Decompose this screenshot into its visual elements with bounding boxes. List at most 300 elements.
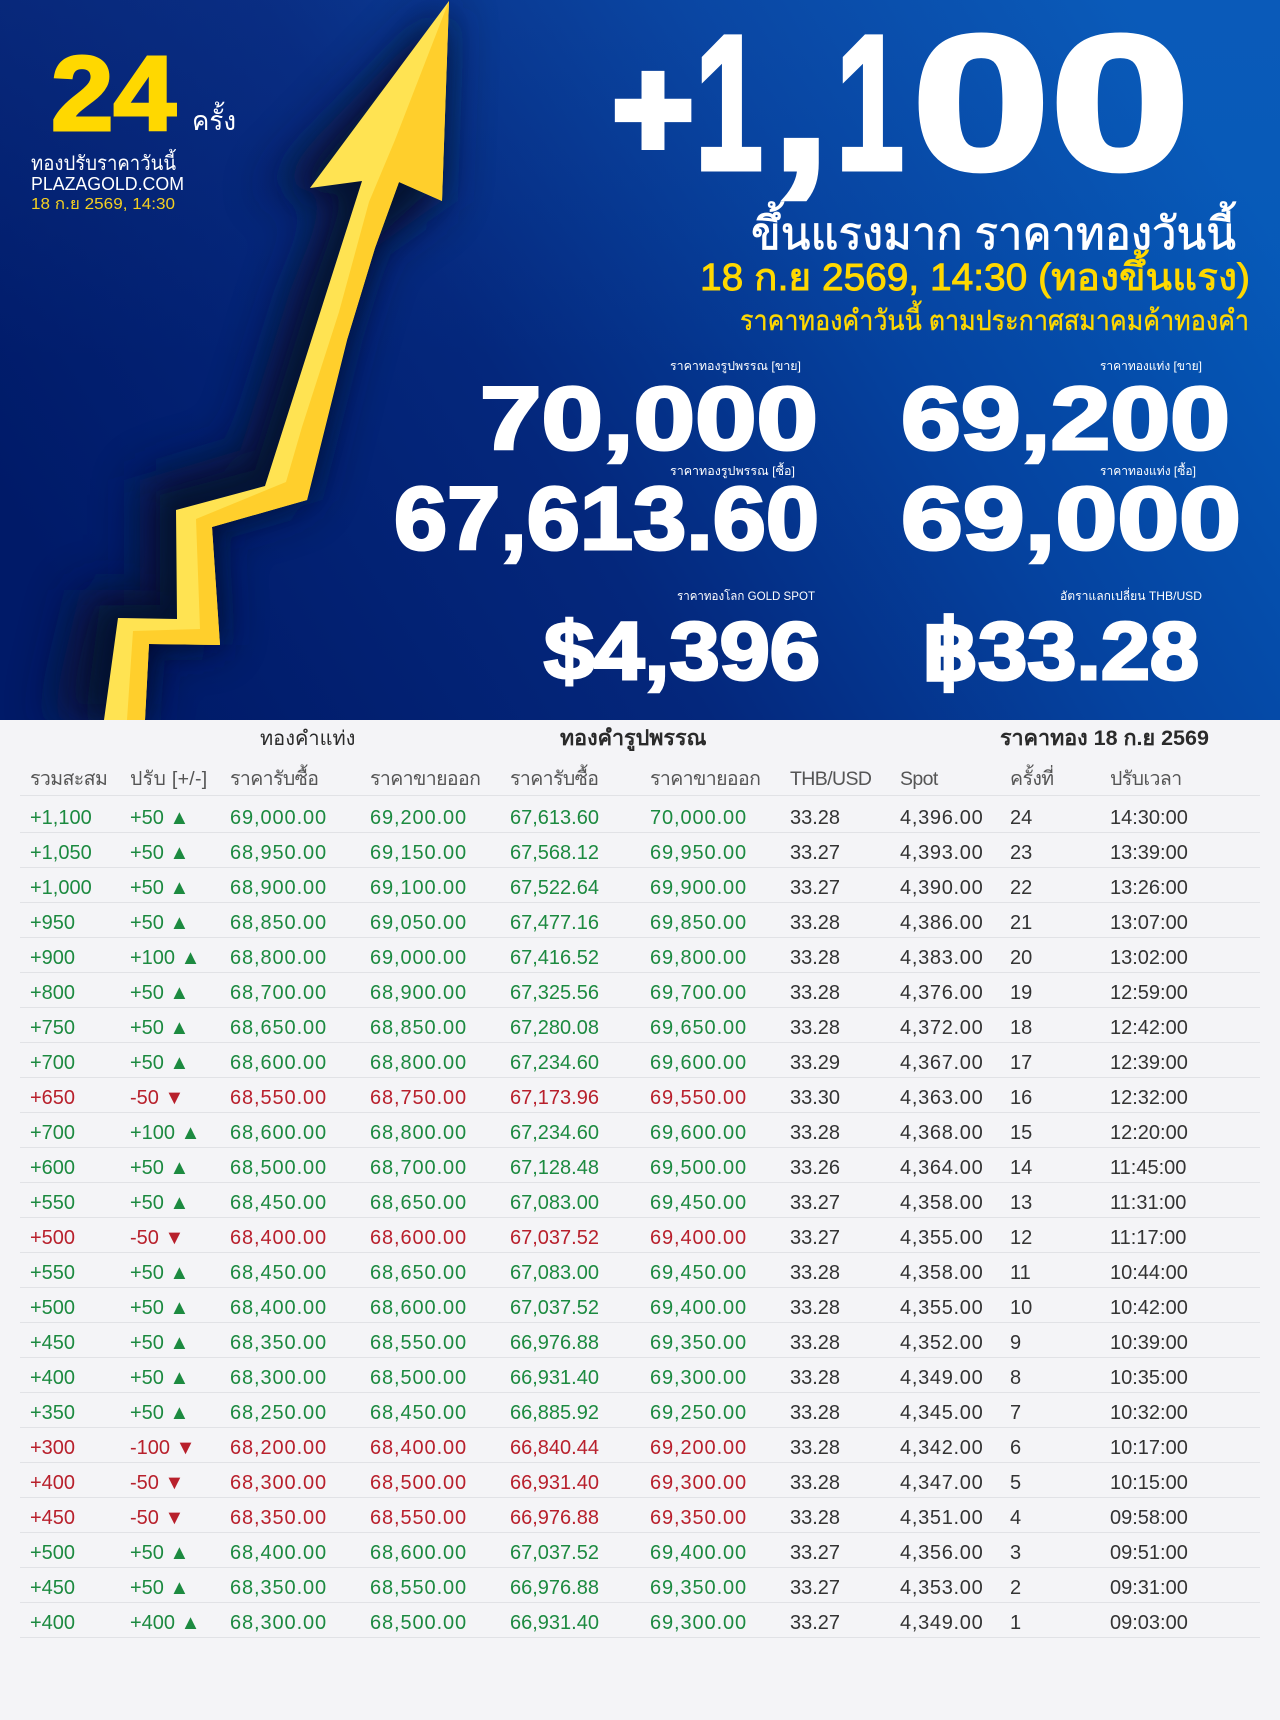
row 13: 33.27 — [790, 1192, 840, 1214]
row 15: 69,600.00 — [650, 1122, 747, 1144]
row 10: 67,037.52 — [510, 1297, 599, 1319]
row 8: 68,300.00 — [230, 1367, 327, 1389]
row 15: 12:20:00 — [1110, 1122, 1188, 1144]
row 22: 33.27 — [790, 877, 840, 899]
row 1: 68,500.00 — [370, 1612, 467, 1634]
row 16: -50 ▼ — [130, 1087, 184, 1109]
row 12: +500 — [30, 1227, 75, 1249]
row 4: 4,351.00 — [900, 1507, 983, 1529]
row 24: +50 ▲ — [130, 807, 189, 829]
row 7: 7 — [1010, 1402, 1021, 1424]
row 19: +800 — [30, 982, 75, 1004]
row 9: 69,350.00 — [650, 1332, 747, 1354]
row 21: 69,050.00 — [370, 912, 467, 934]
row 4: 66,976.88 — [510, 1507, 599, 1529]
headline change +1,100: , — [772, 0, 830, 210]
price: bar buy: 69,000 — [901, 468, 1241, 568]
row 1: 69,300.00 — [650, 1612, 747, 1634]
row 4: 69,350.00 — [650, 1507, 747, 1529]
row 6: 68,200.00 — [230, 1437, 327, 1459]
row 19: 68,700.00 — [230, 982, 327, 1004]
row 19: 67,325.56 — [510, 982, 599, 1004]
row 20: 68,800.00 — [230, 947, 327, 969]
row 3: 33.27 — [790, 1542, 840, 1564]
headline change +1,100: 1 — [836, 0, 904, 210]
row 7: 4,345.00 — [900, 1402, 983, 1424]
row 15: 68,600.00 — [230, 1122, 327, 1144]
row 17: +700 — [30, 1052, 75, 1074]
row 21: 68,850.00 — [230, 912, 327, 934]
hero banner — [0, 0, 1280, 720]
row 22: 13:26:00 — [1110, 877, 1188, 899]
row 19: +50 ▲ — [130, 982, 189, 1004]
row 5: 5 — [1010, 1472, 1021, 1494]
column headers: ราคาขายออก — [650, 768, 760, 790]
row 16: 16 — [1010, 1087, 1032, 1109]
row 14: 11:45:00 — [1110, 1157, 1186, 1179]
row 1: 66,931.40 — [510, 1612, 599, 1634]
row 13: 67,083.00 — [510, 1192, 599, 1214]
row 3: 09:51:00 — [1110, 1542, 1188, 1564]
price: ornament buy: 67,613.60 — [394, 468, 819, 568]
row 15: 67,234.60 — [510, 1122, 599, 1144]
row 10: 4,355.00 — [900, 1297, 983, 1319]
row 4: 09:58:00 — [1110, 1507, 1188, 1529]
row 1: +400 — [30, 1612, 75, 1634]
row 10: 10 — [1010, 1297, 1032, 1319]
row 1: 68,300.00 — [230, 1612, 327, 1634]
row 17: 12:39:00 — [1110, 1052, 1188, 1074]
row 5: 69,300.00 — [650, 1472, 747, 1494]
headline change +1,100: 0 — [912, 0, 1050, 210]
row 1: 4,349.00 — [900, 1612, 983, 1634]
row 3: 69,400.00 — [650, 1542, 747, 1564]
row 1: +400 ▲ — [130, 1612, 200, 1634]
column headers — [20, 760, 1260, 796]
row 24: 24 — [1010, 807, 1032, 829]
row 17: 67,234.60 — [510, 1052, 599, 1074]
row 18: 67,280.08 — [510, 1017, 599, 1039]
row 4: -50 ▼ — [130, 1507, 184, 1529]
row 4: +450 — [30, 1507, 75, 1529]
row 9: 66,976.88 — [510, 1332, 599, 1354]
row 15: +700 — [30, 1122, 75, 1144]
row 2: 68,550.00 — [370, 1577, 467, 1599]
row 11 — [20, 1253, 1260, 1288]
row 12 — [20, 1218, 1260, 1253]
row 3: 68,400.00 — [230, 1542, 327, 1564]
headline change +1,100: 0 — [1050, 0, 1190, 210]
row 20: +100 ▲ — [130, 947, 200, 969]
row 14: 67,128.48 — [510, 1157, 599, 1179]
row 20: 69,000.00 — [370, 947, 467, 969]
price table — [0, 720, 1280, 1720]
row 10: 68,600.00 — [370, 1297, 467, 1319]
row 10: 69,400.00 — [650, 1297, 747, 1319]
row 5: 66,931.40 — [510, 1472, 599, 1494]
row 7: 68,250.00 — [230, 1402, 327, 1424]
row 16: +650 — [30, 1087, 75, 1109]
column headers: รวมสะสม — [30, 768, 107, 790]
row 18: 33.28 — [790, 1017, 840, 1039]
row 9: 10:39:00 — [1110, 1332, 1188, 1354]
row 9: 9 — [1010, 1332, 1021, 1354]
row 21: 33.28 — [790, 912, 840, 934]
row 1: 1 — [1010, 1612, 1021, 1634]
row 6: 10:17:00 — [1110, 1437, 1188, 1459]
row 1: 09:03:00 — [1110, 1612, 1188, 1634]
price: ornament buy: ราคาทองรูปพรรณ [ซื้อ] — [670, 462, 795, 479]
row 9: 33.28 — [790, 1332, 840, 1354]
row 2: 33.27 — [790, 1577, 840, 1599]
row 21: 67,477.16 — [510, 912, 599, 934]
row 8: 33.28 — [790, 1367, 840, 1389]
row 23: +50 ▲ — [130, 842, 189, 864]
row 12: 4,355.00 — [900, 1227, 983, 1249]
row 18: 68,850.00 — [370, 1017, 467, 1039]
row 9: 68,350.00 — [230, 1332, 327, 1354]
row 22: 69,100.00 — [370, 877, 467, 899]
row 6: 6 — [1010, 1437, 1021, 1459]
row 8: 10:35:00 — [1110, 1367, 1188, 1389]
price: gold spot: $4,396 — [544, 606, 820, 697]
row 19: 68,900.00 — [370, 982, 467, 1004]
row 24: +1,100 — [30, 807, 92, 829]
row 14: +600 — [30, 1157, 75, 1179]
row 17: 17 — [1010, 1052, 1032, 1074]
row 18 — [20, 1008, 1260, 1043]
column headers: ครั้งที่ — [1010, 768, 1054, 790]
row 23: 23 — [1010, 842, 1032, 864]
row 4: 4 — [1010, 1507, 1021, 1529]
row 7: 66,885.92 — [510, 1402, 599, 1424]
row 9: +50 ▲ — [130, 1332, 189, 1354]
row 11: 68,650.00 — [370, 1262, 467, 1284]
row 10: 10:42:00 — [1110, 1297, 1188, 1319]
row 3 — [20, 1533, 1260, 1568]
row 23 — [20, 833, 1260, 868]
group heading: bar gold: ทองคำแท่ง — [260, 728, 355, 750]
row 19: 69,700.00 — [650, 982, 747, 1004]
row 3: 68,600.00 — [370, 1542, 467, 1564]
headline change +1,100: + — [613, 30, 693, 187]
row 20: 13:02:00 — [1110, 947, 1188, 969]
row 3: 3 — [1010, 1542, 1021, 1564]
price: gold spot: ราคาทองโลก GOLD SPOT — [677, 589, 816, 603]
row 16: 12:32:00 — [1110, 1087, 1188, 1109]
row 17 — [20, 1043, 1260, 1078]
row 16: 4,363.00 — [900, 1087, 983, 1109]
row 20: 33.28 — [790, 947, 840, 969]
row 11: 33.28 — [790, 1262, 840, 1284]
row 22: 4,390.00 — [900, 877, 983, 899]
row 23: 69,150.00 — [370, 842, 467, 864]
row 8: 8 — [1010, 1367, 1021, 1389]
row 6: +300 — [30, 1437, 75, 1459]
row 19: 33.28 — [790, 982, 840, 1004]
row 21: 69,850.00 — [650, 912, 747, 934]
row 22: 22 — [1010, 877, 1032, 899]
row 4: 68,550.00 — [370, 1507, 467, 1529]
row 20: 4,383.00 — [900, 947, 983, 969]
row 22: +1,000 — [30, 877, 92, 899]
price: exchange rate: ฿33.28 — [922, 606, 1199, 697]
row 18: +750 — [30, 1017, 75, 1039]
row 9: 4,352.00 — [900, 1332, 983, 1354]
headline text: 18 ก.ย 2569, 14:30 (ทองขึ้นแรง) — [700, 249, 1250, 299]
row 8: 66,931.40 — [510, 1367, 599, 1389]
row 15: 68,800.00 — [370, 1122, 467, 1144]
row 12: 33.27 — [790, 1227, 840, 1249]
row 12: 69,400.00 — [650, 1227, 747, 1249]
row 13: 68,450.00 — [230, 1192, 327, 1214]
row 12: 68,400.00 — [230, 1227, 327, 1249]
row 9 — [20, 1323, 1260, 1358]
icon: rising gold arrow — [104, 1, 449, 720]
row 23: 69,950.00 — [650, 842, 747, 864]
row 1 — [20, 1603, 1260, 1638]
row 8: 68,500.00 — [370, 1367, 467, 1389]
row 5 — [20, 1463, 1260, 1498]
row 21: 4,386.00 — [900, 912, 983, 934]
row 5: -50 ▼ — [130, 1472, 184, 1494]
row 2: 66,976.88 — [510, 1577, 599, 1599]
row 7: +50 ▲ — [130, 1402, 189, 1424]
row 21 — [20, 903, 1260, 938]
row 18: 18 — [1010, 1017, 1032, 1039]
row 13: 4,358.00 — [900, 1192, 983, 1214]
row 2: +50 ▲ — [130, 1577, 189, 1599]
row 11: 68,450.00 — [230, 1262, 327, 1284]
row 5: 10:15:00 — [1110, 1472, 1188, 1494]
row 10: +500 — [30, 1297, 75, 1319]
row 3: 4,356.00 — [900, 1542, 983, 1564]
row 23: 68,950.00 — [230, 842, 327, 864]
row 11: +550 — [30, 1262, 75, 1284]
row 5: +400 — [30, 1472, 75, 1494]
row 7 — [20, 1393, 1260, 1428]
row 10: +50 ▲ — [130, 1297, 189, 1319]
row 4 — [20, 1498, 1260, 1533]
row 10: 68,400.00 — [230, 1297, 327, 1319]
row 24: 69,000.00 — [230, 807, 327, 829]
row 24 — [20, 798, 1260, 833]
row 9: +450 — [30, 1332, 75, 1354]
column headers: THB/USD — [790, 768, 871, 790]
row 18: +50 ▲ — [130, 1017, 189, 1039]
row 22: 69,900.00 — [650, 877, 747, 899]
price: ornament sell: ราคาทองรูปพรรณ [ขาย] — [670, 359, 801, 374]
row 7: 69,250.00 — [650, 1402, 747, 1424]
row 4: 68,350.00 — [230, 1507, 327, 1529]
row 20: 69,800.00 — [650, 947, 747, 969]
row 11: 69,450.00 — [650, 1262, 747, 1284]
row 21: +50 ▲ — [130, 912, 189, 934]
row 19 — [20, 973, 1260, 1008]
headline change +1,100 — [613, 0, 1190, 210]
row 7: 33.28 — [790, 1402, 840, 1424]
row 12: 68,600.00 — [370, 1227, 467, 1249]
row 5: 68,500.00 — [370, 1472, 467, 1494]
headline text: ขึ้นแรงมาก ราคาทองวันนี้ — [751, 201, 1236, 259]
row 15: +100 ▲ — [130, 1122, 200, 1144]
row 3: 67,037.52 — [510, 1542, 599, 1564]
row 23: 33.27 — [790, 842, 840, 864]
row 20: 20 — [1010, 947, 1032, 969]
row 12: 12 — [1010, 1227, 1032, 1249]
row 15 — [20, 1113, 1260, 1148]
headline change +1,100: 1 — [695, 0, 763, 210]
row 23: +1,050 — [30, 842, 92, 864]
row 20: +900 — [30, 947, 75, 969]
price: exchange rate: อัตราแลกเปลี่ยน THB/USD — [1060, 587, 1202, 603]
headline text — [700, 201, 1250, 336]
row 15: 15 — [1010, 1122, 1032, 1144]
row 24: 67,613.60 — [510, 807, 599, 829]
row 12: -50 ▼ — [130, 1227, 184, 1249]
row 24: 70,000.00 — [650, 807, 747, 829]
row 23: 4,393.00 — [900, 842, 983, 864]
column headers: ปรับ [+/-] — [130, 768, 207, 790]
row 3: +500 — [30, 1542, 75, 1564]
site caption: PLAZAGOLD.COM — [31, 173, 184, 194]
row 6 — [20, 1428, 1260, 1463]
row 2: 68,350.00 — [230, 1577, 327, 1599]
row 6: 68,400.00 — [370, 1437, 467, 1459]
group heading: date: ราคาทอง 18 ก.ย 2569 — [1000, 726, 1209, 750]
counter: 24 times: 24 — [51, 35, 176, 153]
row 12: 67,037.52 — [510, 1227, 599, 1249]
column headers: ราคารับซื้อ — [510, 768, 598, 790]
row 6: 4,342.00 — [900, 1437, 983, 1459]
row 2: 69,350.00 — [650, 1577, 747, 1599]
row 16: 69,550.00 — [650, 1087, 747, 1109]
row 16 — [20, 1078, 1260, 1113]
row 10: 33.28 — [790, 1297, 840, 1319]
row 13: +550 — [30, 1192, 75, 1214]
row 21: 13:07:00 — [1110, 912, 1188, 934]
column headers: ราคารับซื้อ — [230, 768, 318, 790]
site caption: ทองปรับราคาวันนี้ — [31, 149, 176, 175]
row 7: 10:32:00 — [1110, 1402, 1188, 1424]
column headers: ปรับเวลา — [1110, 768, 1182, 790]
row 17: 68,600.00 — [230, 1052, 327, 1074]
row 24: 69,200.00 — [370, 807, 467, 829]
row 10 — [20, 1288, 1260, 1323]
row 23: 67,568.12 — [510, 842, 599, 864]
row 7: 68,450.00 — [370, 1402, 467, 1424]
row 5: 4,347.00 — [900, 1472, 983, 1494]
price: ornament sell: 70,000 — [480, 368, 818, 468]
row 13: 13 — [1010, 1192, 1032, 1214]
row 22: 68,900.00 — [230, 877, 327, 899]
row 6: 66,840.44 — [510, 1437, 599, 1459]
column headers: ราคาขายออก — [370, 768, 480, 790]
row 11: 67,083.00 — [510, 1262, 599, 1284]
row 14: 33.26 — [790, 1157, 840, 1179]
row 15: 33.28 — [790, 1122, 840, 1144]
row 2: 4,353.00 — [900, 1577, 983, 1599]
row 13: 68,650.00 — [370, 1192, 467, 1214]
row 8: +400 — [30, 1367, 75, 1389]
counter: 24 times: ครั้ง — [192, 101, 236, 136]
row 5: 33.28 — [790, 1472, 840, 1494]
row 14: 69,500.00 — [650, 1157, 747, 1179]
row 22 — [20, 868, 1260, 903]
background gradient — [0, 0, 1280, 720]
row 15: 4,368.00 — [900, 1122, 983, 1144]
row 20: 67,416.52 — [510, 947, 599, 969]
row 16: 68,750.00 — [370, 1087, 467, 1109]
row 19: 19 — [1010, 982, 1032, 1004]
row 11: +50 ▲ — [130, 1262, 189, 1284]
row 21: +950 — [30, 912, 75, 934]
column headers: Spot — [900, 768, 938, 790]
row 6: 33.28 — [790, 1437, 840, 1459]
counter: 24 times — [51, 35, 236, 153]
row 6: -100 ▼ — [130, 1437, 195, 1459]
row 9: 68,550.00 — [370, 1332, 467, 1354]
row 19: 12:59:00 — [1110, 982, 1188, 1004]
row 6: 69,200.00 — [650, 1437, 747, 1459]
row 17: 4,367.00 — [900, 1052, 983, 1074]
row 22: 67,522.64 — [510, 877, 599, 899]
row 17: +50 ▲ — [130, 1052, 189, 1074]
row 4: 33.28 — [790, 1507, 840, 1529]
row 17: 33.29 — [790, 1052, 840, 1074]
site caption: 18 ก.ย 2569, 14:30 — [31, 196, 175, 213]
row 3: +50 ▲ — [130, 1542, 189, 1564]
row 21: 21 — [1010, 912, 1032, 934]
group heading: ornament gold: ทองคำรูปพรรณ — [560, 726, 706, 750]
row 8: +50 ▲ — [130, 1367, 189, 1389]
price: bar sell: 69,200 — [901, 368, 1230, 468]
row 13: +50 ▲ — [130, 1192, 189, 1214]
row 13: 69,450.00 — [650, 1192, 747, 1214]
row 18: 4,372.00 — [900, 1017, 983, 1039]
row 20 — [20, 938, 1260, 973]
row 24: 4,396.00 — [900, 807, 983, 829]
row 16: 67,173.96 — [510, 1087, 599, 1109]
row 5: 68,300.00 — [230, 1472, 327, 1494]
row 18: 69,650.00 — [650, 1017, 747, 1039]
row 11: 11 — [1010, 1262, 1031, 1284]
row 23: 13:39:00 — [1110, 842, 1188, 864]
row 22: +50 ▲ — [130, 877, 189, 899]
row 18: 12:42:00 — [1110, 1017, 1188, 1039]
row 14 — [20, 1148, 1260, 1183]
row 14: 68,700.00 — [370, 1157, 467, 1179]
row 7: +350 — [30, 1402, 75, 1424]
site caption — [31, 149, 184, 213]
row 11: 4,358.00 — [900, 1262, 983, 1284]
row 14: +50 ▲ — [130, 1157, 189, 1179]
row 17: 69,600.00 — [650, 1052, 747, 1074]
row 1: 33.27 — [790, 1612, 840, 1634]
arrow shadow — [50, 1, 449, 720]
row 13 — [20, 1183, 1260, 1218]
row 14: 68,500.00 — [230, 1157, 327, 1179]
price: bar sell: ราคาทองแท่ง [ขาย] — [1100, 359, 1202, 373]
row 8 — [20, 1358, 1260, 1393]
row 13: 11:31:00 — [1110, 1192, 1186, 1214]
row 2: 09:31:00 — [1110, 1577, 1188, 1599]
row 16: 33.30 — [790, 1087, 840, 1109]
row 2: +450 — [30, 1577, 75, 1599]
row 24: 14:30:00 — [1110, 807, 1188, 829]
row 18: 68,650.00 — [230, 1017, 327, 1039]
row 11: 10:44:00 — [1110, 1262, 1188, 1284]
